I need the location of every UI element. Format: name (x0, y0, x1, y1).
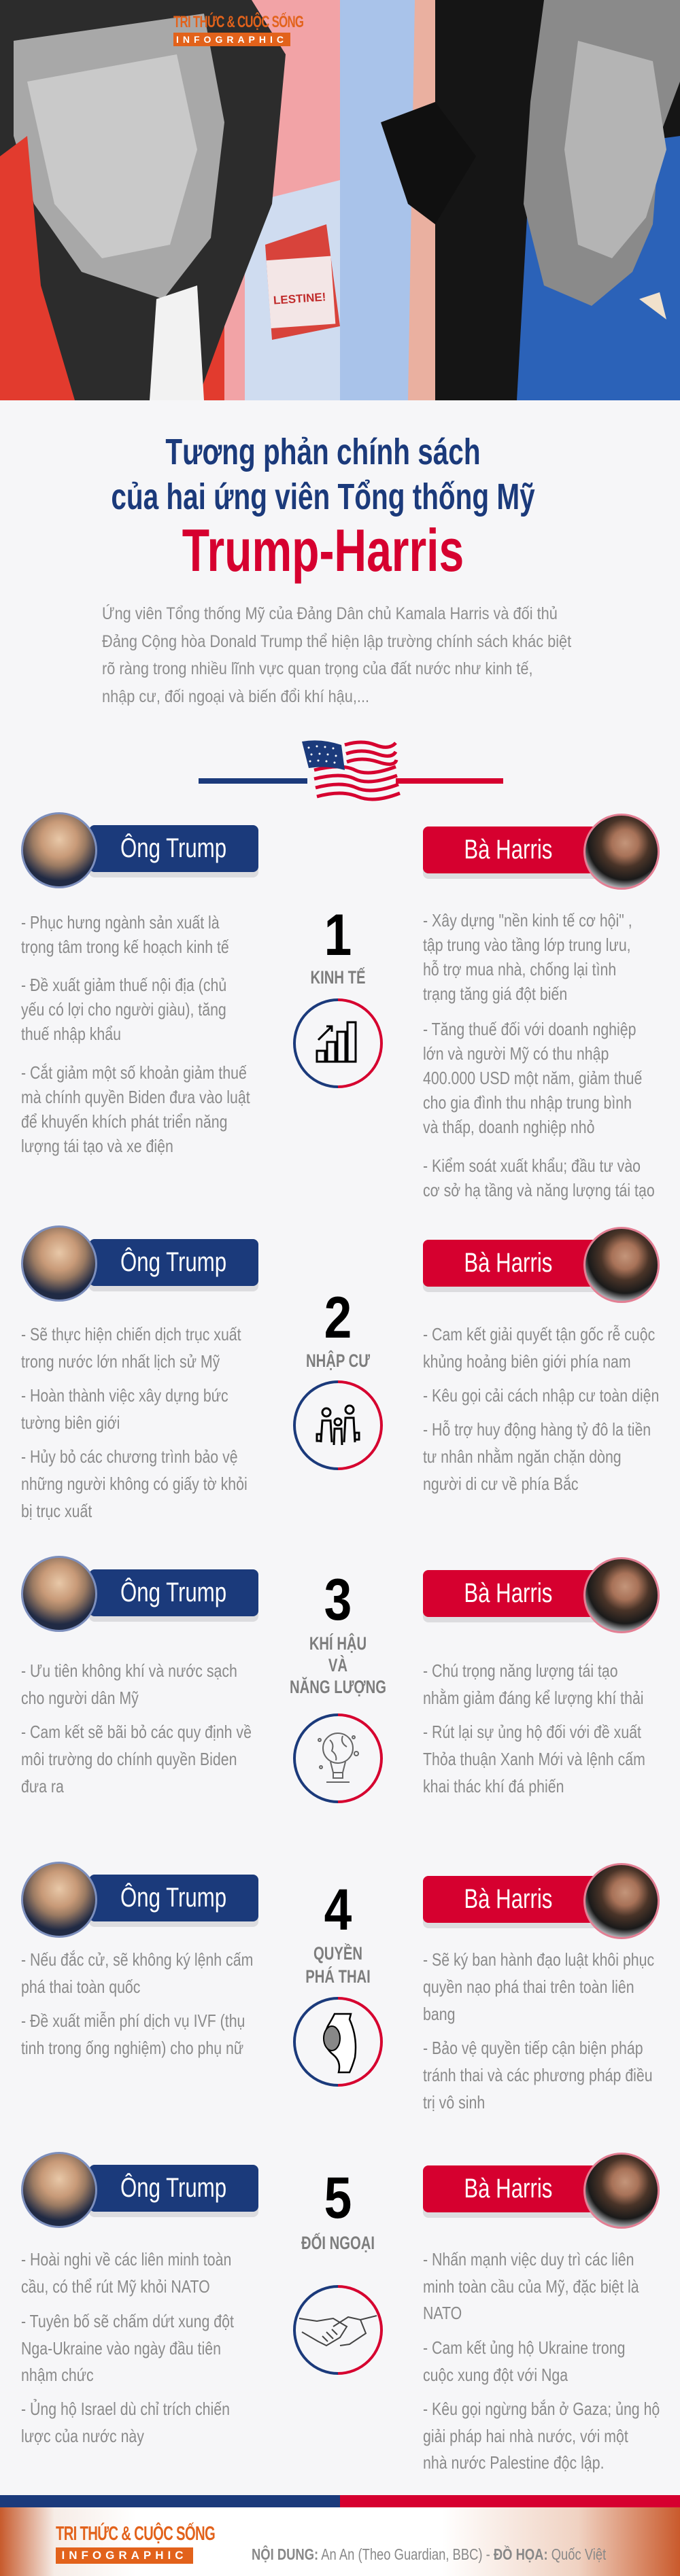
Trump points: yếu có lợi cho người giàu), tăng (21, 999, 226, 1020)
number 2: 2 (324, 1285, 352, 1351)
Trump header (21, 1862, 258, 1938)
Trump points: đưa ra (21, 1776, 64, 1796)
Trump points: tường biên giới (21, 1412, 120, 1433)
Harris points: - Sẽ ký ban hành đạo luật khôi phục (423, 1949, 654, 1970)
Harris points: khủng hoảng biên giới phía nam (423, 1351, 631, 1372)
divider with flag (199, 740, 503, 801)
Trump points: mà chính quyền Biden đưa vào luật (21, 1087, 250, 1107)
Harris points: - Tăng thuế đối với doanh nghiệp (423, 1019, 636, 1039)
Trump points: nhậm chức (21, 2365, 94, 2385)
label quyen pha thai: PHÁ THAI (305, 1966, 371, 1987)
Trump points: - Hoài nghi về các liên minh toàn (21, 2249, 231, 2269)
intro text: nhập cư, đối ngoại và biến đổi khí hậu,... (102, 686, 369, 706)
Trump header: Ông Trump (120, 1883, 227, 1913)
intro text: Đảng Cộng hòa Donald Trump thể hiện lập trường chính sách khác biệt (102, 632, 571, 651)
label doi ngoai: ĐỐI NGOẠI (301, 2233, 375, 2253)
Trump points: phá thai toàn quốc (21, 1977, 140, 1997)
Trump points (21, 2249, 234, 2446)
title (111, 432, 535, 584)
Harris points: khai thác khí đá phiến (423, 1776, 564, 1796)
Trump points: - Ưu tiên không khí và nước sạch (21, 1660, 237, 1681)
Harris points: trị vô sinh (423, 2092, 485, 2112)
Trump points (21, 1660, 252, 1796)
label khi hau: KHÍ HẬU (309, 1633, 367, 1654)
Trump points: - Nếu đắc cử, sẽ không ký lệnh cấm (21, 1949, 253, 1970)
label khi hau: NĂNG LƯỢNG (290, 1677, 386, 1697)
icon: growth chart (293, 998, 383, 1088)
header photo collage: LESTINE! (273, 290, 326, 307)
footer (0, 2495, 680, 2576)
Harris header: Bà Harris (464, 1578, 552, 1608)
Trump points: - Hủy bỏ các chương trình bảo vệ (21, 1446, 238, 1467)
Harris points: - Rút lại sự ủng hộ đối với đề xuất (423, 1722, 641, 1742)
Harris header: Bà Harris (464, 835, 552, 865)
header photo collage (0, 0, 680, 400)
Harris points: người di cư về phía Bắc (423, 1474, 579, 1494)
Harris points: - Nhấn mạnh việc duy trì các liên (423, 2249, 634, 2269)
Harris header (423, 814, 660, 890)
number 3: 3 (324, 1567, 352, 1633)
Trump points: bị trục xuất (21, 1501, 92, 1521)
Trump points: - Sẽ thực hiện chiến dịch trục xuất (21, 1324, 241, 1344)
Harris points (423, 1660, 645, 1796)
Trump points (21, 912, 250, 1156)
credits: NỘI DUNG: An An (Theo Guardian, BBC) - ĐỒ HỌA: Quốc Việt (252, 2545, 606, 2563)
Harris points: quyền nạo phá thai trên toàn liên (423, 1977, 634, 1997)
SECTION 4 (21, 1862, 660, 2112)
Trump points (21, 1324, 248, 1521)
Trump points (21, 1949, 253, 2058)
Trump header (21, 812, 258, 888)
Harris points: hỗ trợ mua nhà, chống lại tình (423, 959, 616, 979)
icon: globe bulb (293, 1713, 383, 1803)
SECTION 5 (21, 2152, 660, 2473)
Harris header: Bà Harris (464, 2174, 552, 2204)
footer logo: INFOGRAPHIC (61, 2549, 188, 2562)
Trump points: - Đề xuất giảm thuế nội địa (chủ (21, 975, 226, 995)
number 4: 4 (324, 1877, 352, 1943)
icon: pregnancy (293, 1997, 383, 2087)
Trump header: Ông Trump (120, 1247, 227, 1277)
intro text: Ứng viên Tổng thống Mỹ của Đảng Dân chủ Kamala Harris và đối thủ (102, 604, 558, 623)
Harris points: - Cam kết giải quyết tận gốc rễ cuộc (423, 1324, 655, 1344)
Harris header (423, 1863, 660, 1939)
icon: handshake (293, 2285, 383, 2375)
Trump header (21, 1225, 258, 1302)
Harris points: nhằm giảm đáng kể lượng khí thải (423, 1688, 644, 1708)
intro text (102, 604, 571, 706)
Harris points: NATO (423, 2303, 462, 2323)
Trump points: thuế nhập khẩu (21, 1024, 121, 1044)
Harris points (423, 1324, 659, 1494)
Harris header: Bà Harris (464, 1884, 552, 1914)
number 5: 5 (324, 2165, 352, 2231)
Trump points: để khuyến khích phát triển năng (21, 1111, 227, 1132)
Trump points: - Phục hưng ngành sản xuất là (21, 912, 220, 933)
number 1: 1 (324, 903, 352, 968)
Trump points: trong nước lớn nhất lịch sử Mỹ (21, 1351, 220, 1372)
Harris points: cuộc xung đột với Nga (423, 2364, 568, 2384)
icon: family (293, 1380, 383, 1470)
Harris points: giải pháp hai nhà nước, với một (423, 2425, 628, 2446)
title: Tương phản chính sách (165, 432, 481, 472)
SECTION 2 (21, 1225, 660, 1521)
Harris points: nhà nước Palestine độc lập. (423, 2452, 604, 2473)
Harris points: tập trung vào tầng lớp trung lưu, (423, 935, 631, 955)
Trump points: tinh trong ống nghiệm) cho phụ nữ (21, 2038, 243, 2058)
Harris points: minh toàn cầu của Mỹ, đặc biệt là (423, 2276, 639, 2296)
title: của hai ứng viên Tổng thống Mỹ (111, 476, 535, 517)
Harris points: cơ sở hạ tầng và năng lượng tái tạo (423, 1180, 655, 1200)
logo top: TRI THỨC & CUỘC SỐNG (173, 13, 303, 31)
Trump points: - Cắt giảm một số khoản giảm thuế (21, 1062, 247, 1083)
footer logo: TRI THỨC & CUỘC SỐNG (56, 2523, 215, 2545)
label khi hau: VÀ (328, 1655, 347, 1675)
Trump points: lượng tái tạo và xe điện (21, 1136, 173, 1156)
Trump points: những người không có giấy tờ khỏi (21, 1474, 248, 1494)
label khi hau (290, 1633, 386, 1697)
Trump points: cho người dân Mỹ (21, 1688, 139, 1708)
Harris points: cho gia đình thu nhập trung bình (423, 1092, 632, 1113)
logo top: INFOGRAPHIC (176, 34, 288, 45)
Harris points: tránh thai và các phương pháp điều (423, 2065, 653, 2085)
title: Trump-Harris (182, 517, 464, 584)
Harris points: - Chú trọng năng lượng tái tạo (423, 1660, 618, 1681)
Harris header (423, 2153, 660, 2229)
Harris points: bang (423, 2004, 455, 2024)
Harris points: - Xây dựng "nền kinh tế cơ hội" , (423, 910, 632, 930)
Harris points: lớn và người Mỹ có thu nhập (423, 1043, 609, 1064)
Trump points: cầu, có thể rút Mỹ khỏi NATO (21, 2276, 210, 2296)
Trump header: Ông Trump (120, 1578, 227, 1607)
Harris points: tư nhân nhằm ngăn chặn dòng (423, 1446, 622, 1467)
Harris points: - Hỗ trợ huy động hàng tỷ đô la tiền (423, 1419, 651, 1440)
label kinh te: KINH TẾ (310, 967, 366, 988)
Trump points: - Cam kết sẽ bãi bỏ các quy định về (21, 1722, 252, 1742)
Harris points: - Kêu gọi ngừng bắn ở Gaza; ủng hộ (423, 2399, 660, 2419)
Harris points: - Cam kết ủng hộ Ukraine trong (423, 2337, 625, 2358)
SECTION 3 (21, 1556, 660, 1803)
Harris points: - Kêu gọi cải cách nhập cư toàn diện (423, 1385, 659, 1406)
Harris points: - Bảo vệ quyền tiếp cận biện pháp (423, 2038, 643, 2058)
Harris points: và thấp, doanh nghiệp nhỏ (423, 1117, 595, 1137)
Harris points (423, 1949, 654, 2112)
label nhap cu: NHẬP CƯ (306, 1351, 370, 1371)
Trump header: Ông Trump (120, 2173, 227, 2203)
Trump points: môi trường do chính quyền Biden (21, 1749, 237, 1769)
logo top (173, 12, 303, 46)
SECTION 1 (21, 812, 660, 1200)
Harris points: 400.000 USD một năm, giảm thuế (423, 1068, 642, 1088)
Trump points: - Đề xuất miễn phí dịch vụ IVF (thụ (21, 2011, 245, 2031)
label quyen pha thai (305, 1943, 371, 1987)
intro text: rõ ràng trong nhiều lĩnh vực quan trọng của đất nước như kinh tế, (102, 659, 532, 678)
Harris header: Bà Harris (464, 1248, 552, 1278)
footer logo (56, 2522, 215, 2564)
Harris points: trạng tăng giá đột biến (423, 984, 567, 1004)
Trump header (21, 1556, 258, 1632)
Trump points: - Tuyên bố sẽ chấm dứt xung đột (21, 2311, 234, 2331)
Harris header (423, 1557, 660, 1633)
Trump header (21, 2152, 258, 2228)
Trump points: - Hoàn thành việc xây dựng bức (21, 1385, 228, 1406)
Harris points: Thỏa thuận Xanh Mới và lệnh cấm (423, 1749, 645, 1769)
Trump points: lược của nước này (21, 2425, 144, 2446)
Harris points (423, 2249, 660, 2473)
Trump points: Nga-Ukraine vào ngày đầu tiên (21, 2338, 221, 2359)
Harris header (423, 1227, 660, 1303)
label quyen pha thai: QUYỀN (313, 1943, 362, 1964)
Trump points: - Ủng hộ Israel dù chỉ trích chiến (21, 2399, 230, 2419)
Trump points: trọng tâm trong kế hoạch kinh tế (21, 937, 229, 957)
Harris points: - Kiểm soát xuất khẩu; đầu tư vào (423, 1155, 641, 1176)
Trump header: Ông Trump (120, 833, 227, 863)
Harris points (423, 910, 655, 1200)
